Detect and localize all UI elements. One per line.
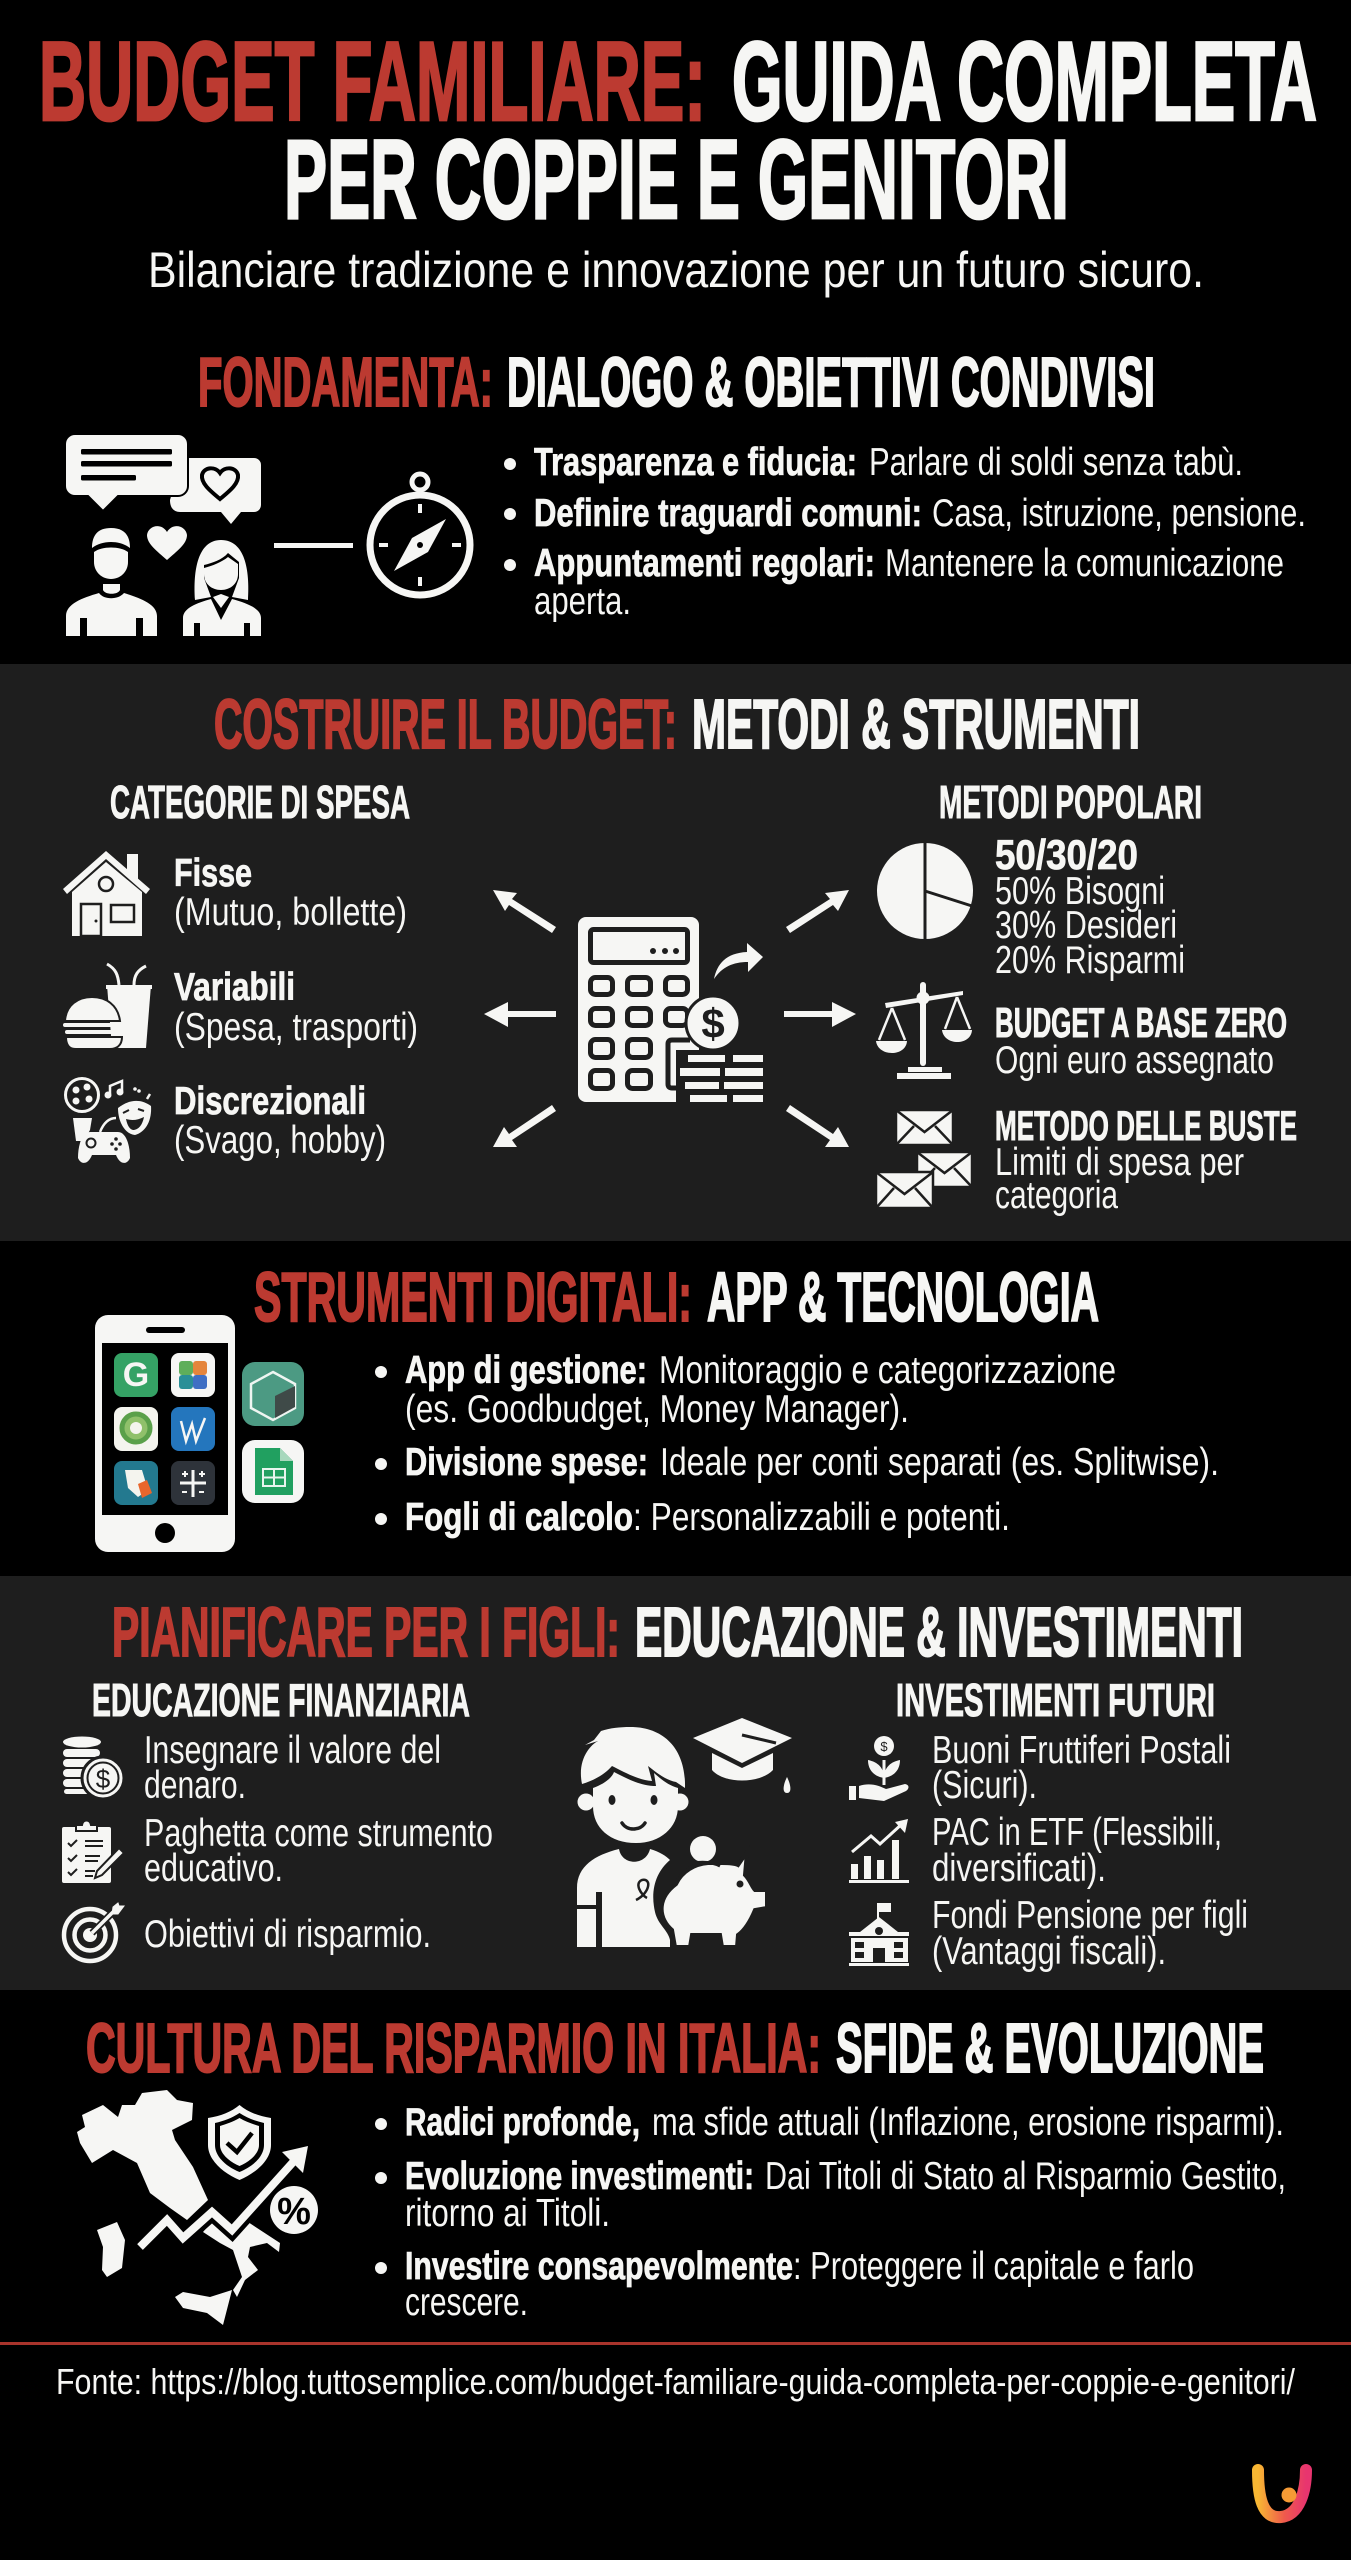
heading: fondamenta: FONDAMENTA: (198, 343, 493, 421)
heading: strumenti digitali: STRUMENTI DIGITALI: (254, 1258, 692, 1336)
icon: house (63, 851, 150, 936)
text: fondamenta bullets (504, 441, 1306, 623)
heading: fondamenta (198, 343, 1155, 421)
text: strumenti bullets: Divisione spese: (405, 1441, 648, 1484)
icon: phone with apps: G (123, 1356, 149, 1394)
text: variabili (174, 966, 418, 1049)
text: cultura bullets: : Proteggere il capitale e farlo (793, 2245, 1194, 2288)
text: 50/30/20: 50% Bisogni (995, 870, 1165, 913)
icon: phone with apps (95, 1315, 304, 1552)
text: variabili: (Spesa, trasporti) (174, 1006, 418, 1049)
icon: compass (370, 474, 470, 595)
icon: calculator with coins (578, 917, 766, 1106)
text: metodo delle buste (995, 1102, 1297, 1217)
icon: calculator with coins: $ (701, 1000, 725, 1047)
text: budget a base zero: Ogni euro assegnato (995, 1039, 1274, 1082)
text: variabili: Variabili (174, 966, 295, 1009)
icon: scale (876, 982, 972, 1079)
subheading: categorie di spesa: CATEGORIE DI SPESA (110, 776, 410, 828)
panel: costruire il budget (0, 664, 1351, 1241)
text: cultura bullets: Radici profonde, (405, 2101, 640, 2144)
text: fondamenta bullets: Parlare di soldi senza tabù. (869, 441, 1243, 484)
text: strumenti bullets: Fogli di calcolo (405, 1496, 633, 1539)
icon: plant in hand (849, 1736, 908, 1801)
title: BUDGET FAMILIARE: (39, 19, 706, 144)
text: strumenti bullets: (es. Goodbudget, Money Manager). (405, 1388, 909, 1431)
text: strumenti bullets: Monitoraggio e categorizzazione (659, 1349, 1116, 1392)
text: valore del denaro: denaro. (144, 1764, 246, 1807)
text: fondamenta bullets: Appuntamenti regolari: (534, 542, 875, 585)
text: paghetta: Paghetta come strumento (144, 1812, 493, 1855)
arrows from calculator (484, 890, 856, 1147)
text: pac in etf: diversificati). (932, 1847, 1106, 1890)
text: buoni fruttiferi: (Sicuri). (932, 1764, 1037, 1807)
footer divider (0, 2342, 1351, 2345)
text: metodo delle buste: categoria (995, 1174, 1118, 1217)
icon: coins (63, 1736, 124, 1799)
icon: school (849, 1903, 909, 1966)
text: paghetta (144, 1812, 493, 1890)
text: strumenti bullets: Ideale per conti separati (es. Splitwise). (660, 1441, 1219, 1484)
text: strumenti bullets (375, 1349, 1219, 1539)
panel: pianificare per i figli (0, 1576, 1351, 1990)
text: fondamenta bullets: aperta. (534, 580, 631, 623)
text: buoni fruttiferi: Buoni Fruttiferi Postali (932, 1729, 1231, 1772)
text: 50/30/20: 50/30/20 (995, 831, 1138, 878)
title (39, 19, 1317, 242)
panel: strumenti digitali (95, 1258, 1219, 1552)
text: cultura bullets: Evoluzione investimenti: (405, 2155, 754, 2198)
text: pac in etf: PAC in ETF (Flessibili, (932, 1811, 1222, 1854)
heading: pianificare per i figli: PIANIFICARE PER I FIGLI: (112, 1593, 620, 1671)
text: cultura bullets: crescere. (405, 2281, 528, 2324)
text: budget a base zero (995, 999, 1287, 1082)
subheading: educazione finanziaria: EDUCAZIONE FINANZIARIA (92, 1674, 470, 1726)
text: pac in etf (932, 1811, 1222, 1890)
text: obiettivi: Obiettivi di risparmio. (144, 1913, 431, 1956)
text: fisse: (Mutuo, bollette) (174, 891, 407, 934)
icon: italy map with shield and growth arrow: % (277, 2191, 311, 2233)
icon: leisure (66, 1078, 151, 1163)
text: strumenti bullets: App di gestione: (405, 1349, 647, 1392)
text: cultura bullets: ritorno ai Titoli. (405, 2192, 610, 2235)
text: discrezionali (174, 1080, 386, 1162)
text: fondi pensione (932, 1894, 1248, 1973)
icon: burger and drink (63, 964, 152, 1049)
panel: fondamenta (65, 343, 1306, 636)
icon: target (64, 1903, 124, 1961)
icon: child with piggy bank and graduation cap (577, 1718, 792, 1947)
icon: pie chart (877, 842, 973, 940)
text: buoni fruttiferi (932, 1729, 1231, 1807)
subtitle: Bilanciare tradizione e innovazione per un futuro sicuro. (148, 242, 1204, 298)
text: 50/30/20 (995, 831, 1185, 982)
text: fisse (174, 852, 407, 934)
text: valore del denaro (144, 1729, 441, 1807)
text: fondi pensione: (Vantaggi fiscali). (932, 1930, 1166, 1973)
text: 50/30/20: 20% Risparmi (995, 939, 1185, 982)
text: fondamenta bullets: Definire traguardi comuni: (534, 492, 922, 535)
panel: pianificare per i figli: $ (880, 1739, 888, 1754)
icon: growth chart (849, 1819, 909, 1883)
text: valore del denaro: Insegnare il valore del (144, 1729, 441, 1772)
text: fondi pensione: Fondi Pensione per figli (932, 1894, 1248, 1937)
panel: cultura del risparmio (77, 2009, 1286, 2325)
text: fondamenta bullets: Trasparenza e fiducia: (534, 441, 857, 484)
text: paghetta: educativo. (144, 1847, 283, 1890)
icon: logo (1258, 2470, 1306, 2517)
text: cultura bullets: Investire consapevolmente (405, 2245, 793, 2288)
icon: italy map with shield and growth arrow (77, 2090, 318, 2325)
panel: pianificare per i figli: $ (96, 1764, 111, 1794)
text: fisse: Fisse (174, 852, 252, 895)
text: discrezionali: Discrezionali (174, 1080, 366, 1123)
text: cultura bullets (375, 2101, 1286, 2324)
text: strumenti bullets: : Personalizzabili e potenti. (633, 1496, 1010, 1539)
heading: costruire il budget: COSTRUIRE IL BUDGET: (214, 685, 677, 763)
text: 50/30/20: 30% Desideri (995, 904, 1177, 947)
text: discrezionali: (Svago, hobby) (174, 1119, 386, 1162)
icon: clipboard (62, 1820, 124, 1883)
icon: envelopes (876, 1110, 972, 1208)
text: metodo delle buste: Limiti di spesa per (995, 1141, 1244, 1184)
heading: cultura del risparmio: CULTURA DEL RISPARMIO IN ITALIA: (86, 2009, 821, 2087)
connector line (274, 543, 353, 548)
icon: couple talking (65, 434, 261, 636)
